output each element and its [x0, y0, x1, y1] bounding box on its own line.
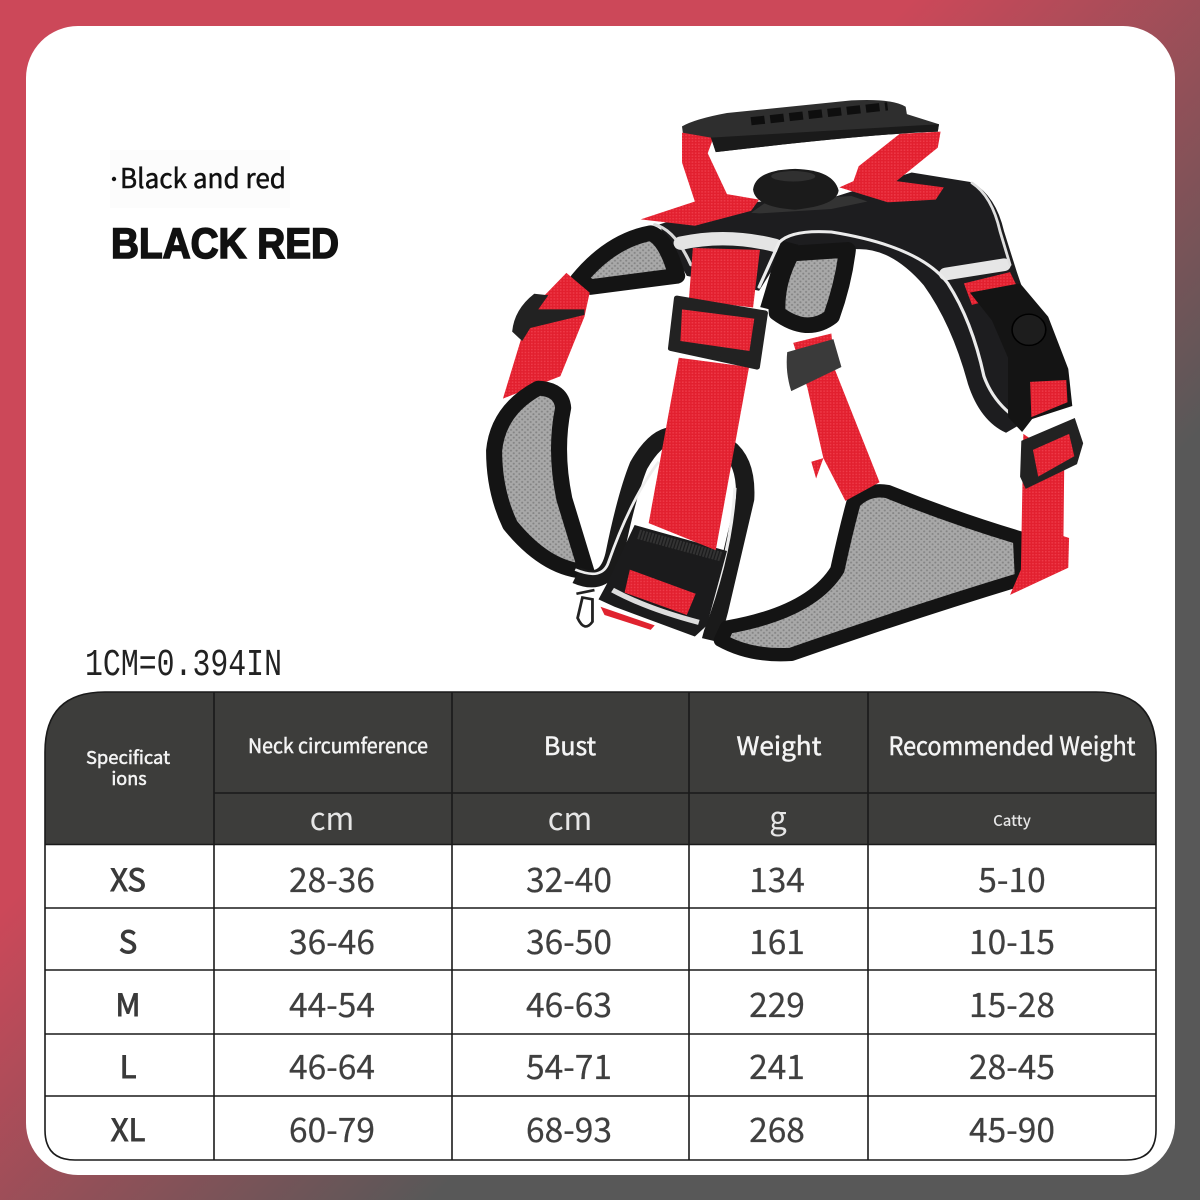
row: XL: 60-79 [289, 1103, 375, 1152]
central strap [649, 248, 760, 550]
size column: S [119, 917, 137, 962]
row: M: 15-28 [969, 978, 1055, 1027]
front loop band [575, 436, 745, 640]
rear slider [787, 339, 841, 391]
header labels: Recommended Weight [888, 727, 1136, 763]
size column: L [120, 1042, 136, 1087]
reflective strips on back panel [655, 183, 1010, 274]
header labels: ions [111, 765, 147, 791]
row: S: 36-50 [526, 915, 612, 964]
size column: M [115, 980, 141, 1025]
unit labels [310, 793, 1031, 839]
row: L: 28-45 [969, 1040, 1055, 1089]
row: S: 161 [749, 915, 805, 964]
rear strap [793, 334, 880, 501]
heading: BLACK RED: BLACK RED [111, 220, 339, 268]
header labels: Weight [736, 727, 822, 763]
row: M: 44-54 [289, 978, 375, 1027]
central slider buckle [671, 298, 765, 367]
handle grip [682, 100, 939, 152]
right lower strap [1010, 434, 1069, 595]
table header background [45, 692, 1156, 844]
left loop pad [494, 388, 586, 571]
row: S: 36-46 [289, 915, 375, 964]
chest pad [721, 491, 1022, 655]
lower chest panel [598, 525, 727, 637]
row: L: 54-71 [526, 1040, 612, 1089]
unit labels: g [769, 793, 787, 838]
row: XL: 68-93 [526, 1103, 612, 1152]
color name label: Black and red [120, 157, 286, 196]
lower chest stitching and red tab [600, 534, 721, 630]
header labels: Specificat [86, 744, 170, 770]
upper left pad [578, 233, 677, 287]
metal clip [576, 590, 594, 626]
row: XL: 45-90 [969, 1103, 1055, 1152]
row: S [289, 915, 1055, 964]
product image: harness [486, 100, 1084, 662]
row: M: 46-63 [526, 978, 612, 1027]
header labels: Neck circumference [248, 730, 428, 759]
row: S: 10-15 [969, 915, 1055, 964]
row: XS: 32-40 [526, 853, 612, 902]
row: XS: 134 [749, 853, 805, 902]
row: L: 241 [749, 1040, 805, 1089]
row: XL [289, 1103, 1055, 1152]
size column: XS [110, 855, 146, 900]
row: XS: 28-36 [289, 853, 375, 902]
shoulder pad [759, 232, 1010, 413]
size column: XL [111, 1105, 145, 1150]
header labels: Bust [544, 727, 597, 763]
row: L: 46-64 [289, 1040, 375, 1089]
handle straps [641, 132, 944, 226]
unit labels: cm [548, 794, 592, 839]
table grid [45, 692, 1156, 1160]
header labels [86, 727, 1136, 791]
row: M: 229 [749, 978, 805, 1027]
side release buckle [964, 272, 1072, 432]
row: L [289, 1040, 1055, 1089]
row: XS [289, 853, 1046, 902]
right slider [1021, 419, 1082, 488]
row: XS: 5-10 [978, 853, 1046, 902]
top control knob [751, 169, 868, 213]
unit labels: Catty [993, 810, 1031, 831]
row: XL: 268 [749, 1103, 805, 1152]
back panel [659, 173, 1032, 433]
unit labels: cm [310, 794, 354, 839]
left upper strap [503, 273, 590, 399]
size column [110, 855, 146, 1150]
row: M [289, 978, 1055, 1027]
left side slider [512, 294, 584, 341]
